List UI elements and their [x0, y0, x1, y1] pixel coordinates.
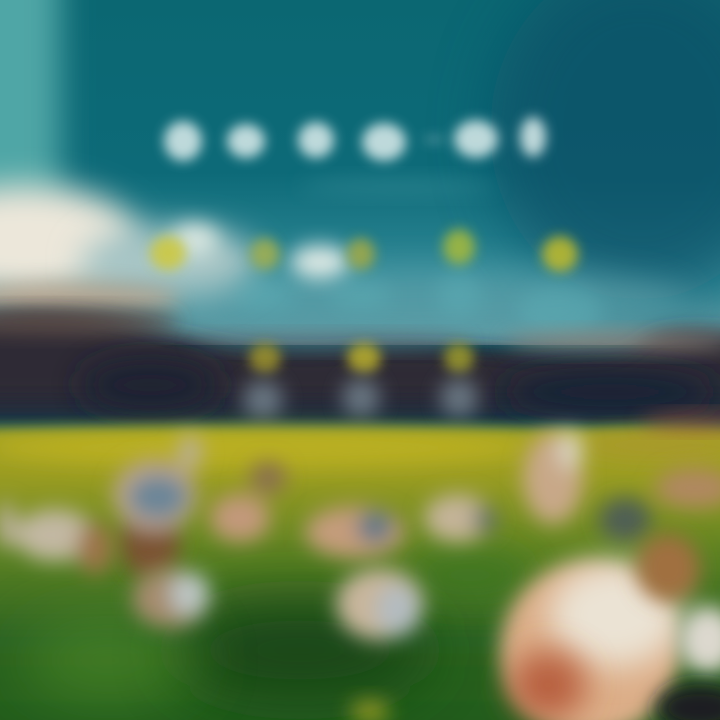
icons: yellow lower row [249, 343, 474, 373]
flock of sheep [0, 430, 720, 720]
heading: blurred title text [164, 117, 546, 161]
subtitle: faint text [300, 177, 500, 195]
sheep: lower left [132, 568, 210, 628]
icons: yellow upper row [150, 229, 578, 272]
text blocks: upper row captions [235, 273, 602, 338]
meadow [0, 414, 720, 720]
sheep: upper right [523, 430, 583, 524]
sheep: left large [113, 434, 202, 578]
sky background [0, 0, 720, 345]
sheep: right side [599, 468, 720, 542]
sheep: large foreground [500, 534, 720, 720]
horizon: dark hills [0, 310, 720, 424]
sheep: far left [0, 501, 113, 574]
clouds [0, 185, 350, 314]
sheep: lower center [336, 568, 424, 640]
text blocks: lower row captions [243, 378, 478, 420]
sheep: center right [424, 494, 497, 542]
sheep: small center-left [210, 462, 286, 542]
sheep: center [305, 506, 405, 558]
